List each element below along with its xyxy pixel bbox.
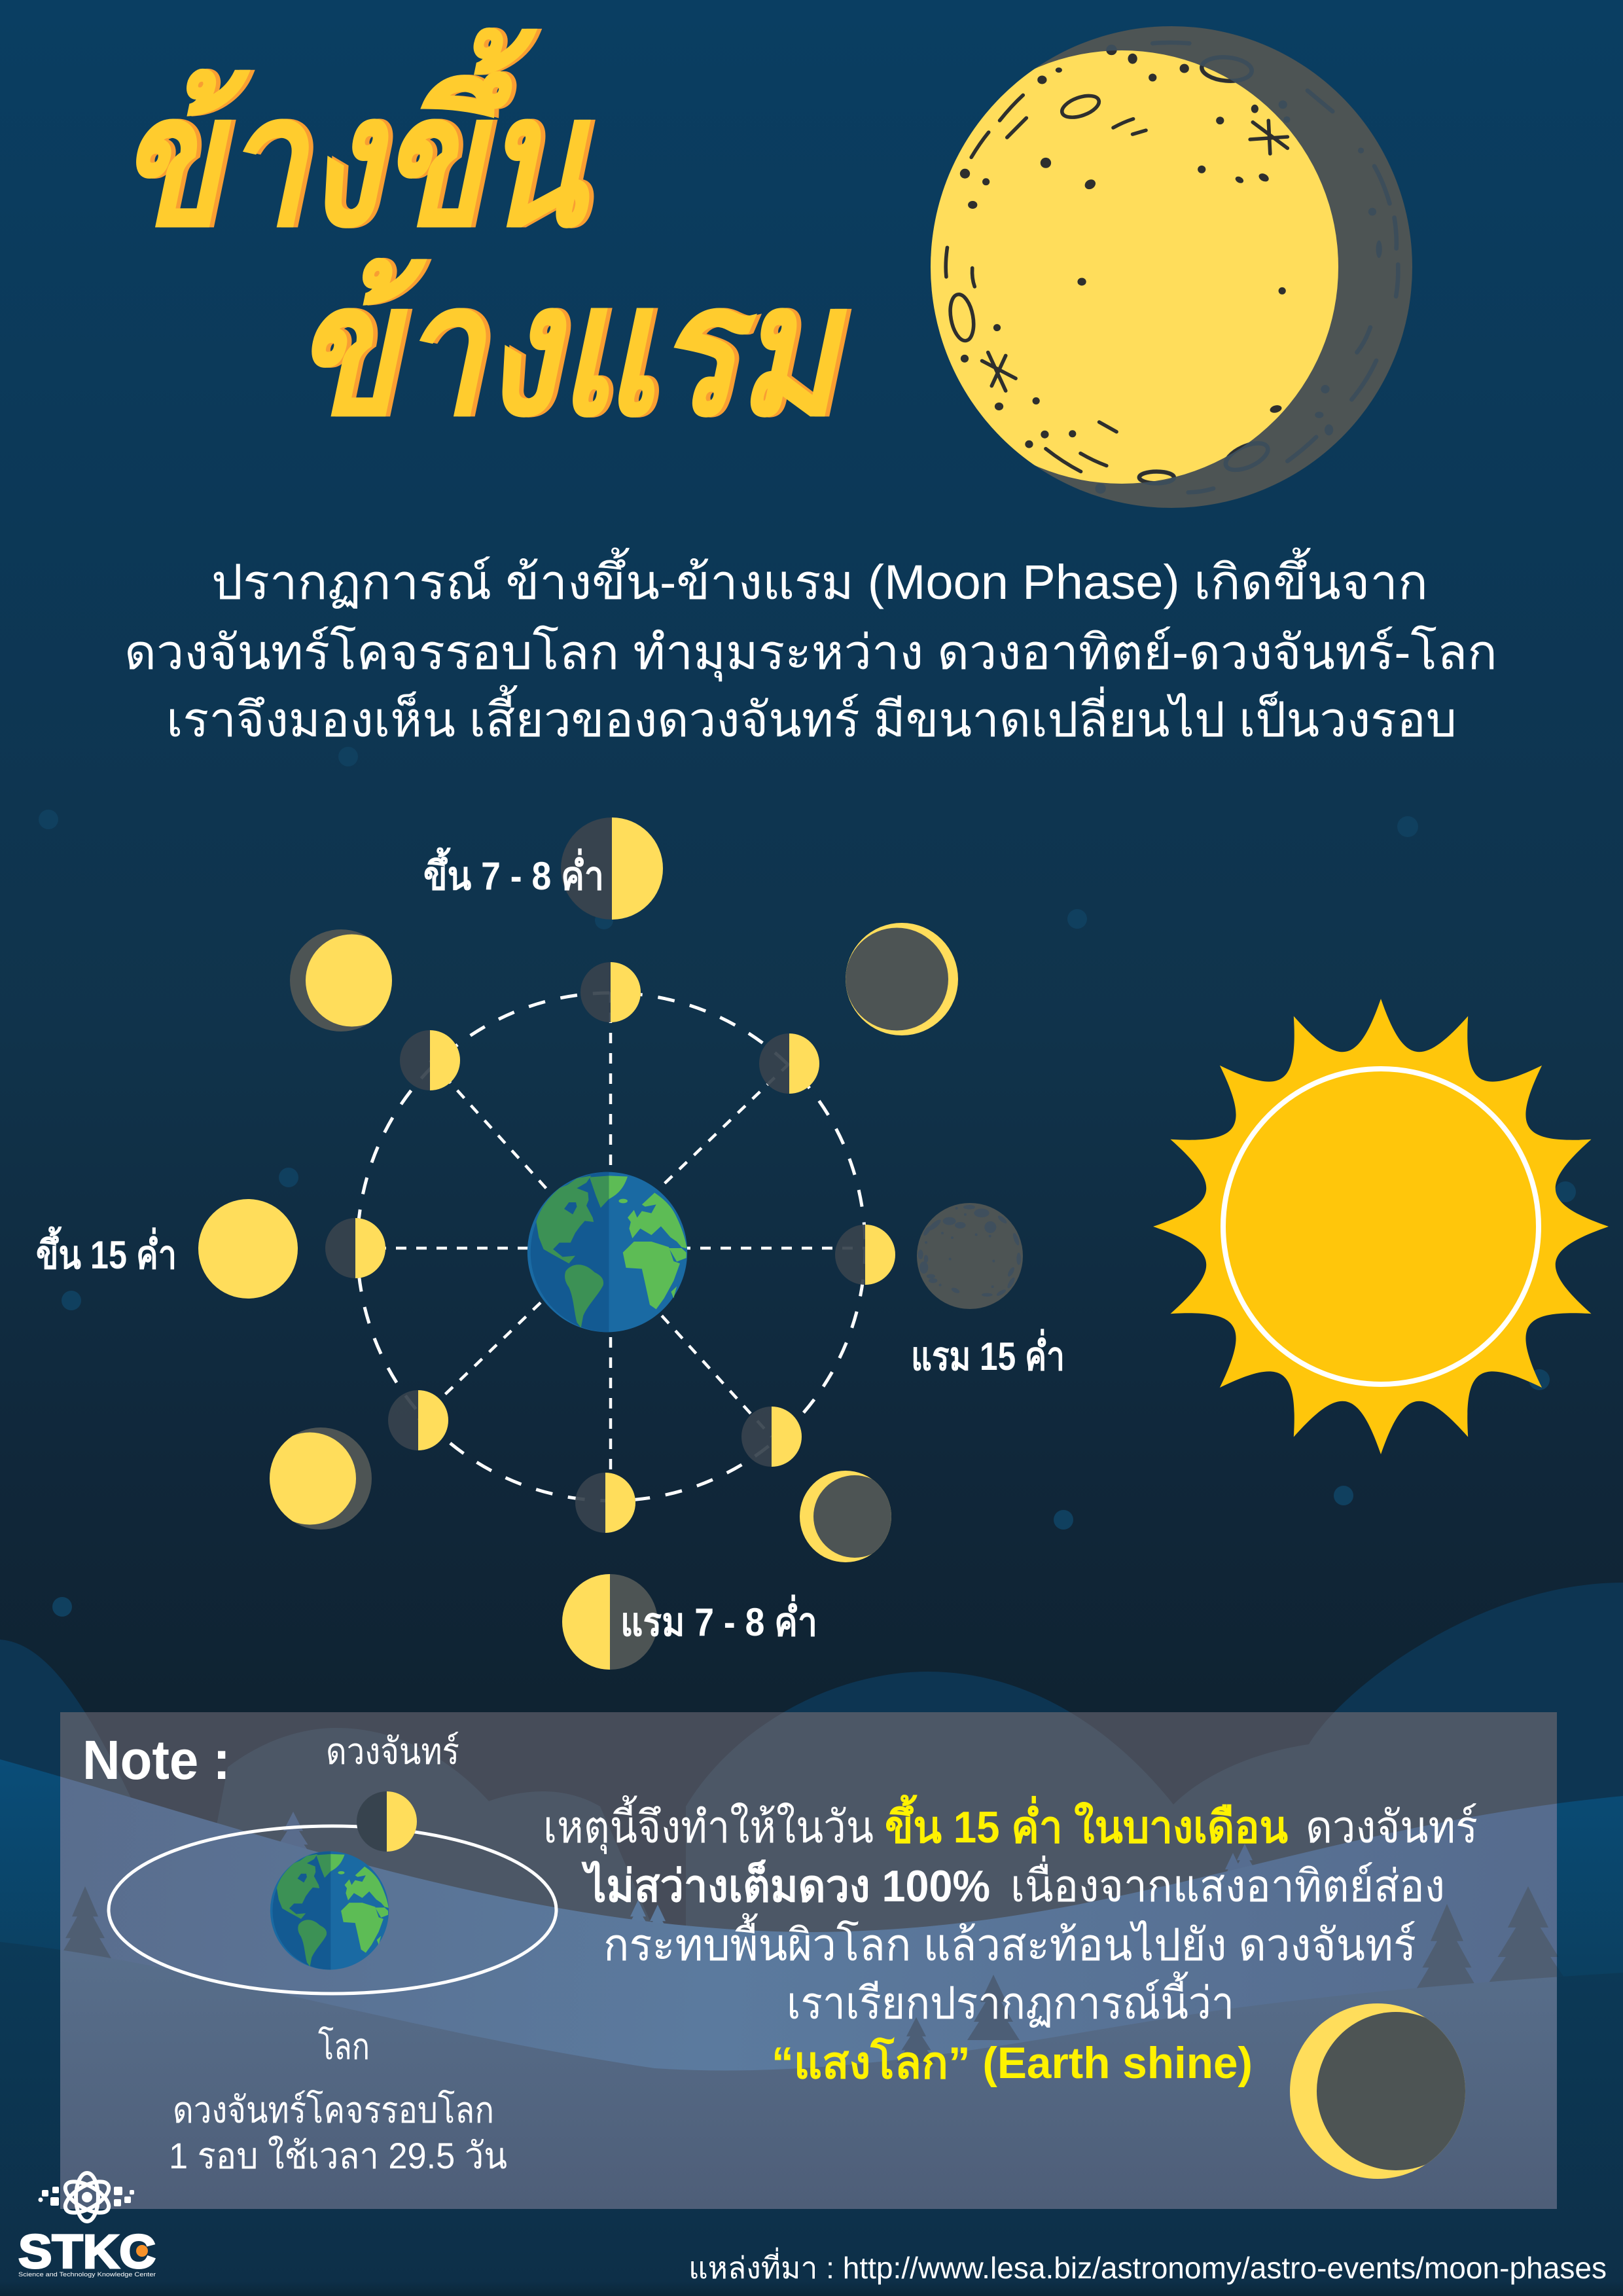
label waning 15: แรม 15 ค่ำ [911, 1329, 1065, 1378]
small earth [270, 1851, 389, 1970]
title line 2: ข้างแรม [298, 249, 854, 453]
logo wordmark: STKC [18, 2226, 156, 2278]
intro line 3: เราจึงมองเห็น เสี้ยวของดวงจันทร์ มีขนาดเปลี่ยนไป เป็นวงรอบ [166, 685, 1457, 747]
logo atom icon [38, 2173, 134, 2221]
note body: เนื่องจากแสงอาทิตย์ส่อง [1010, 1856, 1445, 1911]
inner moon right [835, 1225, 895, 1285]
phase: waning gibbous [264, 1427, 372, 1530]
label waxing 15: ขึ้น 15 ค่ำ [36, 1226, 177, 1277]
intro line 2: ดวงจันทร์โคจรรอบโลก ทำมุมระหว่าง ดวงอาทิตย์-ดวงจันทร์-โลก [124, 625, 1497, 682]
craters on lit side [946, 45, 1287, 483]
label earth: โลก [318, 2026, 370, 2067]
label waning 7-8: แรม 7 - 8 ค่ำ [620, 1594, 817, 1644]
note heading: Note : [82, 1729, 230, 1791]
orbit ellipse [109, 1826, 556, 1994]
phase: waning crescent [800, 1471, 896, 1562]
logo tagline: Science and Technology Knowledge Center [18, 2271, 156, 2278]
inner moon upper right [759, 1033, 819, 1094]
orbit and spokes [355, 992, 865, 1503]
phase labels [36, 847, 1065, 1644]
note body: ขึ้น 15 ค่ำ ในบางเดือน [885, 1794, 1288, 1852]
note body: เหตุนี้จึงทำให้ในวัน [543, 1795, 874, 1854]
phase: full moon [198, 1199, 298, 1299]
outer phases [198, 817, 1023, 1670]
orbit caption: 1 รอบ ใช้เวลา 29.5 วัน [169, 2135, 507, 2176]
inner moon lower left [388, 1390, 448, 1450]
small moon [357, 1791, 417, 1852]
title line 1: ข้างขึ้น [118, 27, 591, 264]
note body [543, 1794, 1478, 2088]
inner moons [325, 962, 895, 1533]
panel background [60, 1712, 1557, 2209]
phase: waxing crescent [846, 923, 958, 1035]
note panel [60, 1712, 1557, 2209]
inner moon lower right [741, 1407, 802, 1467]
note body: ไม่สว่างเต็มดวง 100% [581, 1859, 990, 1911]
sun [1153, 999, 1609, 1454]
inner moon upper left [400, 1030, 460, 1090]
title line 1: ข้างขึ้น [122, 27, 596, 264]
phase: waxing gibbous [290, 929, 398, 1031]
logo [18, 2173, 156, 2278]
earthshine moon [1290, 2003, 1475, 2179]
note body: กระทบพื้นผิวโลก แล้วสะท้อนไปยัง ดวงจันทร์ [603, 1913, 1416, 1970]
orbit caption [169, 2089, 507, 2176]
phase: last quarter [562, 1574, 658, 1670]
phase: first quarter [561, 817, 663, 920]
phase: new moon [917, 1203, 1023, 1309]
note body: เราเรียกปรากฏการณ์นี้ว่า [787, 1971, 1234, 2028]
inner moon left [325, 1218, 385, 1278]
background stars [39, 747, 1576, 1617]
note body: “แสงโลก” (Earth shine) [772, 2037, 1253, 2088]
logo dot [136, 2245, 148, 2257]
inner moon bottom [575, 1473, 635, 1533]
intro line 1: ปรากฏการณ์ ข้างขึ้น-ข้างแรม (Moon Phase) เกิดขึ้นจาก [211, 547, 1428, 609]
earth [527, 1172, 687, 1332]
title line 2: ข้างแรม [293, 249, 849, 453]
label moon: ดวงจันทร์ [326, 1731, 459, 1772]
intro text [124, 547, 1497, 747]
inner moon top [580, 962, 641, 1022]
note body: ดวงจันทร์ [1306, 1803, 1478, 1852]
big moon [905, 26, 1412, 508]
source: แหล่งที่มา : http://www.lesa.biz/astronomy/astro-events/moon-phases [688, 2247, 1607, 2285]
label waxing 7-8: ขึ้น 7 - 8 ค่ำ [423, 847, 604, 898]
background hills [0, 1583, 1623, 2296]
orbit caption: ดวงจันทร์โคจรรอบโลก [173, 2089, 494, 2130]
craters on shadow side [1095, 43, 1398, 493]
title [118, 27, 854, 453]
